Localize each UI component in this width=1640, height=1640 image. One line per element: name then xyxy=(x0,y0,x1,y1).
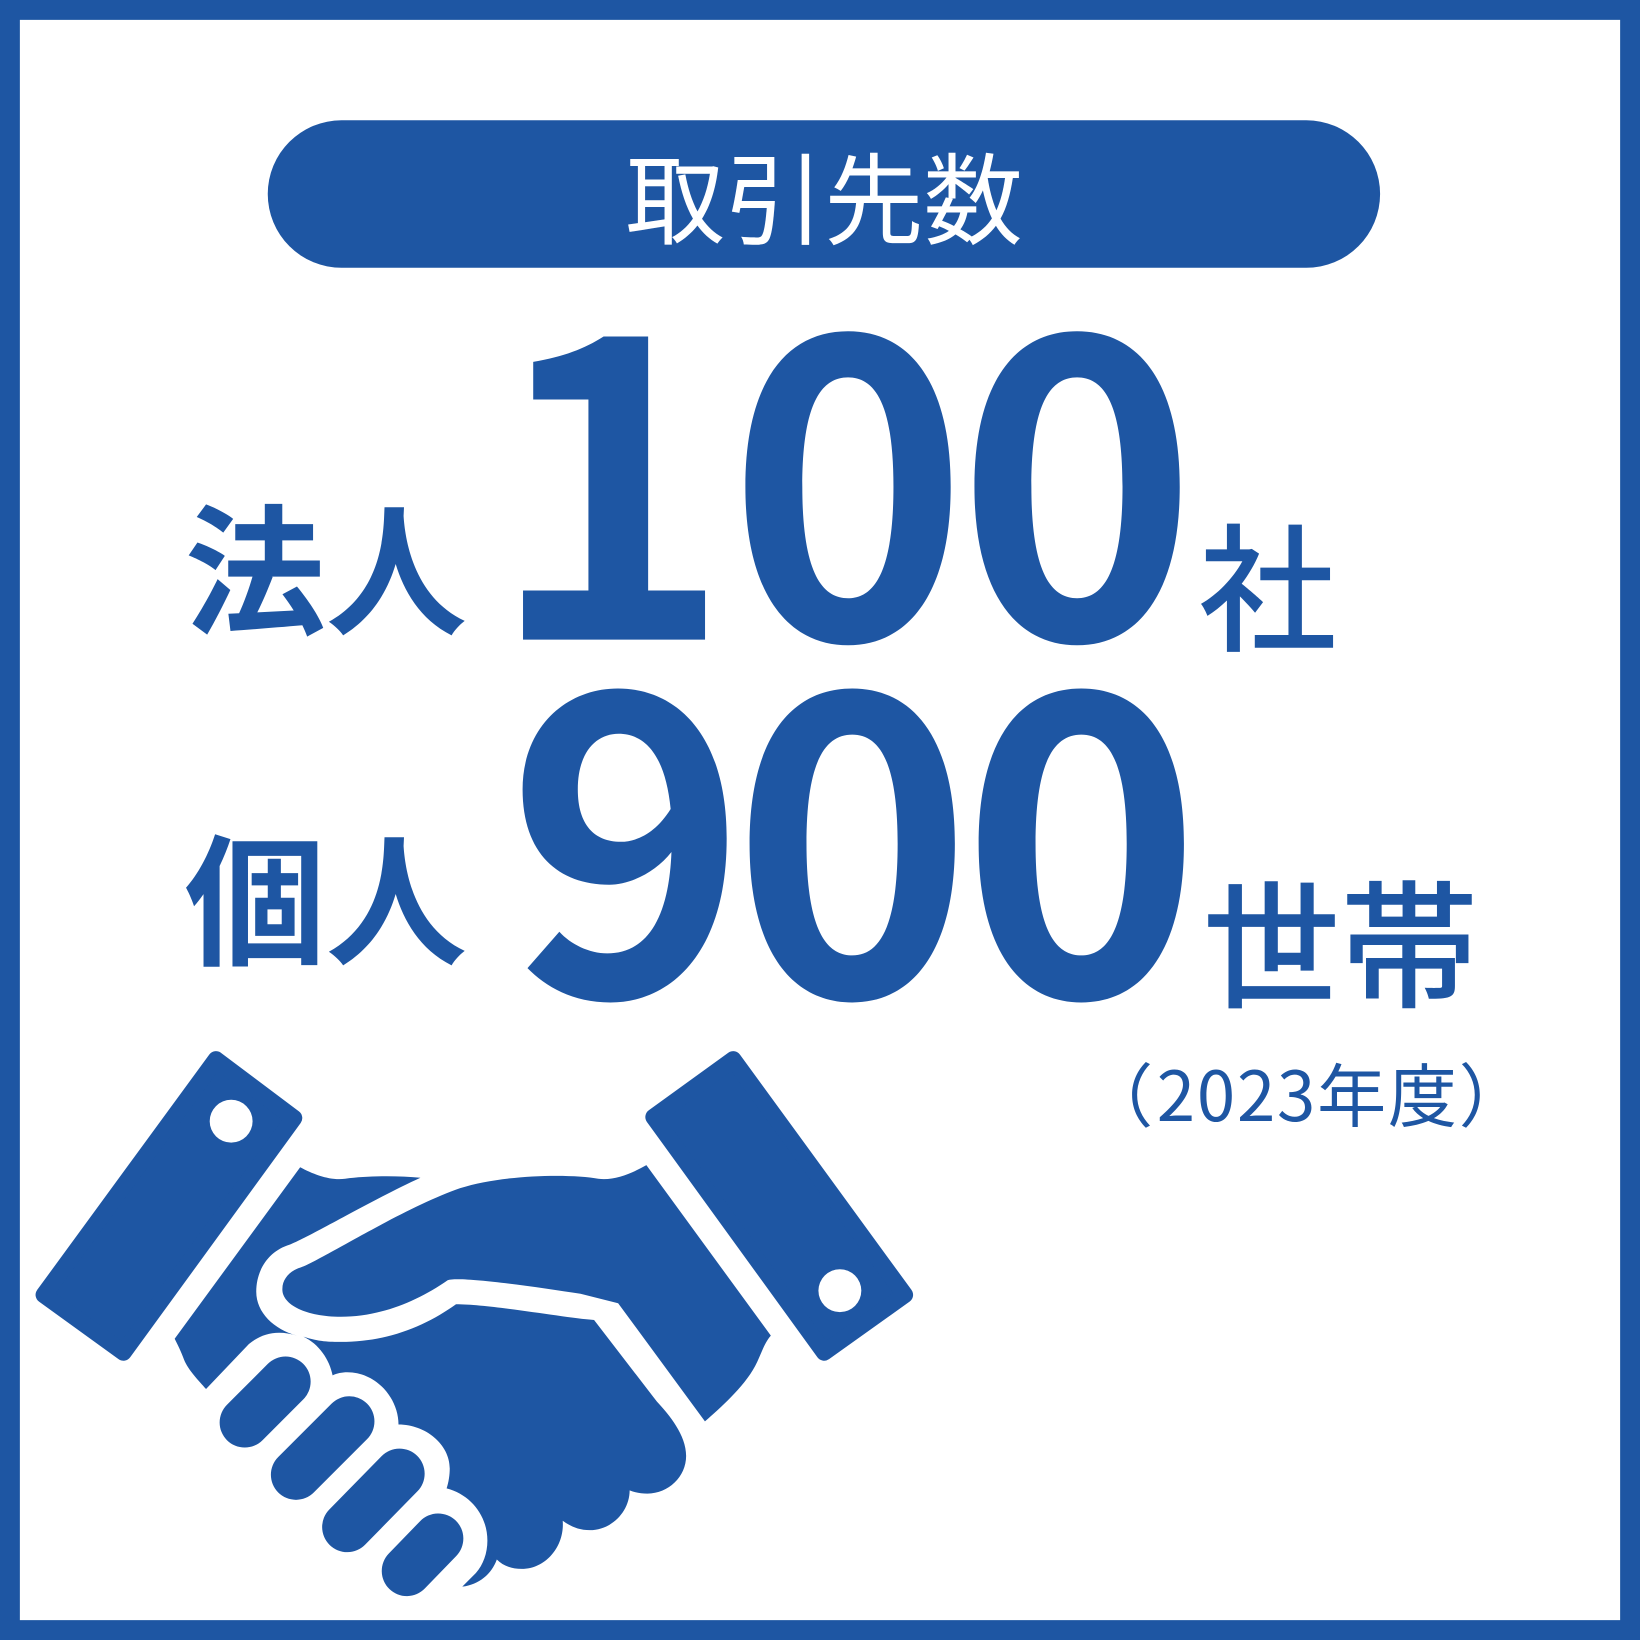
fiscal year note: （2023年度） xyxy=(1084,1041,1530,1141)
row: individual clients 900: 世帯 xyxy=(1202,837,1478,1037)
row: individual clients 900: 個人 xyxy=(185,790,467,995)
left wrist xyxy=(175,1167,420,1389)
heading pill: 取引先数 xyxy=(625,121,1023,265)
icon: handshake xyxy=(44,1060,905,1587)
lower hand xyxy=(303,1304,686,1587)
fingers xyxy=(245,1382,438,1571)
row: corporate clients 100 xyxy=(185,166,1337,758)
row: individual clients 900 xyxy=(185,523,1478,1115)
upper right hand xyxy=(282,1165,771,1421)
row: individual clients 900: 900 xyxy=(506,523,1202,1115)
row: corporate clients 100: 社 xyxy=(1199,480,1337,680)
heading pill xyxy=(268,120,1380,268)
row: corporate clients 100: 100 xyxy=(489,166,1198,758)
right cuff xyxy=(654,1060,905,1352)
row: corporate clients 100: 法人 xyxy=(185,460,467,665)
left cuff xyxy=(44,1060,294,1352)
